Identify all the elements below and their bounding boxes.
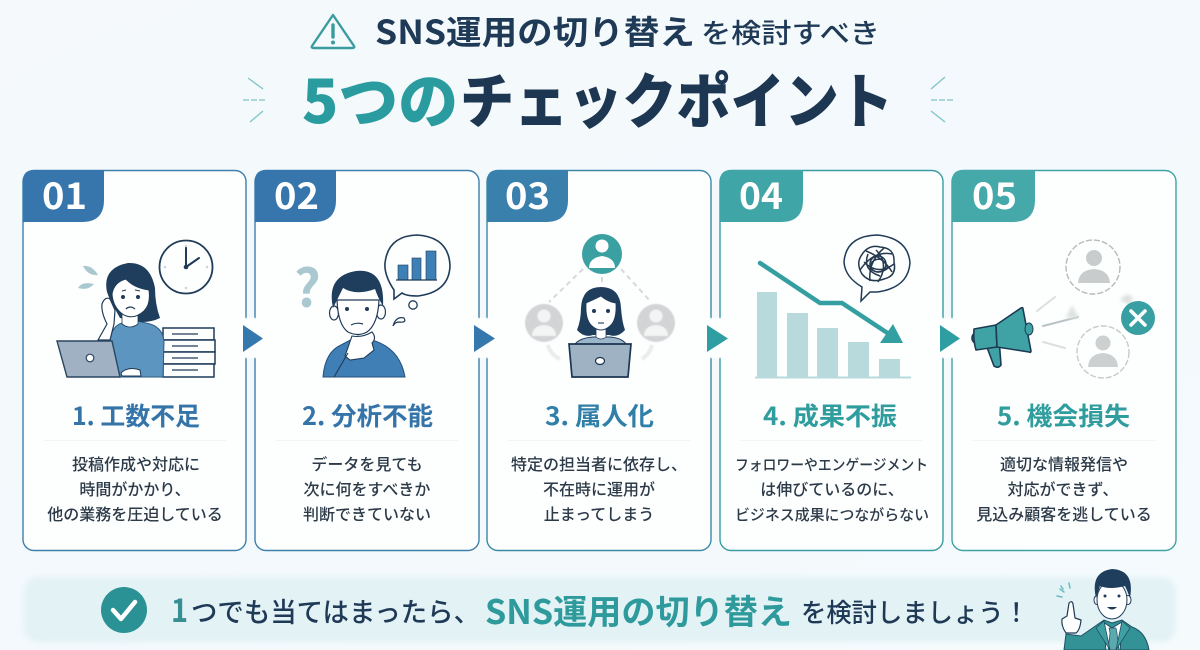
description 1: 投稿作成や対応に [72,451,200,475]
banner background [24,577,1176,642]
hand pointing up [1062,602,1081,633]
icon: megaphone [972,308,1033,367]
description 5: 対応ができず、 [1008,476,1118,500]
title main: チェックポイント: チェックポイント [460,54,893,141]
icon: dashed customer top [1066,240,1120,294]
description 2: データを見ても [311,451,423,475]
heading 4: 4. 成果不振 [763,397,897,433]
badge 04: 04 [739,168,783,220]
badge 03 [487,168,568,222]
illustration: declining bar chart [755,235,911,378]
description 5: 見込み顧客を逃している [976,501,1152,525]
badge 03: 03 [505,168,550,220]
icon: sweat drops [78,266,98,289]
suit [1064,620,1149,650]
description 2 [303,451,431,525]
icon: laptop [57,341,141,377]
badge 01: 01 [42,168,87,220]
badge 05 [952,168,1035,222]
banner text: 1: 1 [171,586,188,632]
badge 04 [720,168,803,222]
panel: card 3 [487,168,711,550]
dashed links [549,269,651,302]
title block [243,6,955,141]
description 4 [735,454,929,525]
description 2: 次に何をすべきか [304,476,430,500]
icon: warning triangle [312,15,354,48]
decorative burst right [931,77,955,122]
description 3 [511,451,687,525]
description 4: ビジネス成果につながらない [735,504,929,525]
illustration: overworked woman with clock, laptop and documents [57,240,215,377]
heading 2: 2. 分析不能 [302,397,433,433]
downward arrow [760,263,903,343]
icon: question mark: ? [294,247,321,322]
woman [98,263,164,377]
icon: check circle [101,587,147,633]
sparkles [1057,583,1070,597]
decorative burst left [243,78,266,122]
icon: tangled thought bubble [844,235,910,301]
description 4: フォロワーやエンゲージメント [735,454,928,475]
arrow 1 to 2 [241,318,265,358]
signal lines [1037,297,1078,348]
woman at laptop [575,287,626,344]
banner text: tail: を検討しましょう！ [801,593,1029,630]
icon: dashed customer bottom [1077,326,1129,378]
description 2: 判断できていない [303,501,431,525]
title accent: 5つの: 5つの [302,54,458,141]
arrow 2 to 3 [473,318,495,358]
badge 01 [23,168,104,222]
badge 05: 05 [972,168,1017,220]
faded person [1066,294,1133,318]
man [323,271,405,377]
icon: x mark [1121,301,1155,335]
icon: right gray person [637,304,675,359]
badge 02 [255,168,336,222]
description 3: 特定の担当者に依存し、 [511,451,687,475]
description 3: 止まってしまう [544,501,654,525]
illustration: person dependency network [525,234,675,377]
badge 02: 02 [274,168,319,220]
panel: card 4 [720,168,943,550]
arrow 4 to 5 [938,318,960,358]
illustration: thinking man with chart bubble [294,235,450,377]
bottom banner [24,569,1176,650]
description 1: 他の業務を圧迫している [47,501,223,525]
description 3: 不在時に運用が [543,476,655,500]
heading 5: 5. 機会損失 [997,397,1130,433]
panel: card 2 [255,168,479,550]
banner text: highlight: SNS運用の切り替え [485,585,792,634]
panel: card 5 [952,168,1176,550]
title line 1 suffix: を検討すべき [701,12,880,51]
icon: laptop [569,344,631,377]
icon: left gray person [525,304,563,359]
arrow 3 to 4 [705,318,728,358]
illustration: pointing businessman [1057,569,1149,650]
description 5: 適切な情報発信や [1000,451,1128,475]
description 1: 時間がかかり、 [79,476,191,500]
description 1 [47,451,223,525]
head [1094,569,1131,619]
description 4: は伸びているのに、 [760,476,904,500]
bars [755,292,911,378]
heading 3: 3. 属人化 [545,397,654,433]
icon: central teal person [582,234,622,274]
shirt and tie [1096,621,1130,650]
illustration: megaphone missing customers [972,240,1155,378]
heading 1: 1. 工数不足 [72,397,200,433]
icon: document stack [163,328,215,377]
icon: speech bubble bar chart [385,235,450,326]
description 5 [976,451,1152,525]
title line 1: SNS運用の切り替え [375,6,695,54]
banner text: lead: つでも当てはまったら、 [191,591,480,630]
panel: card 1 [23,168,246,550]
icon: clock [160,240,212,294]
